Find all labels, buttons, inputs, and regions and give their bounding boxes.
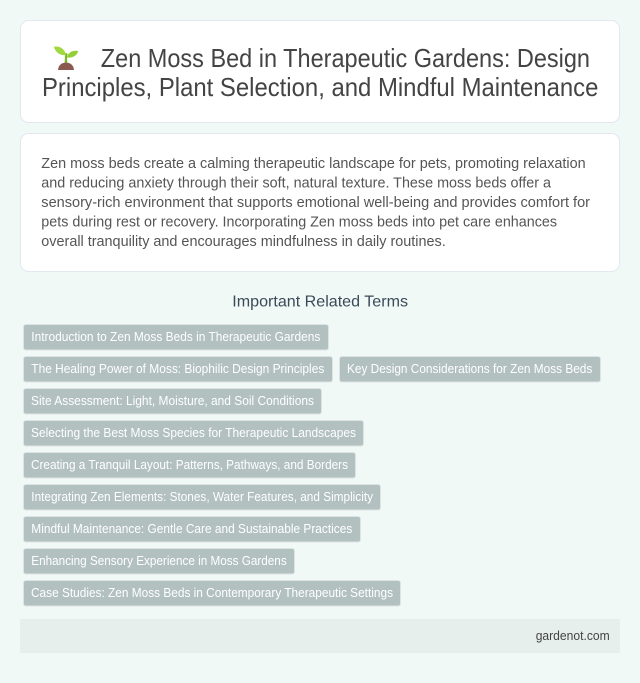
- tag: zen elements: Integrating Zen Elements: Stones, Water Features, and Simplicity: [31, 490, 374, 504]
- footer bar: [20, 619, 620, 653]
- tag: site assessment: [24, 388, 322, 414]
- panel: title card: [20, 20, 620, 122]
- text block: description: pets during rest or recovery. Incorporating Zen moss beds into pet care enhances: [41, 214, 557, 230]
- tag: site assessment: Site Assessment: Light, Moisture, and Soil Conditions: [31, 394, 314, 408]
- text block: description: and reducing anxiety through their soft, natural texture. These moss beds offer a: [41, 176, 551, 192]
- text block: description: [41, 156, 590, 250]
- tag: healing power: The Healing Power of Moss: Biophilic Design Principles: [31, 362, 324, 376]
- tag: tranquil layout: [24, 452, 356, 478]
- tag: introduction: Introduction to Zen Moss Beds in Therapeutic Gardens: [31, 330, 320, 344]
- title: Zen Moss Bed in Therapeutic Gardens: Design: [101, 45, 590, 73]
- tag: tranquil layout: Creating a Tranquil Layout: Patterns, Pathways, and Borders: [31, 458, 348, 472]
- tag: moss species: [24, 420, 364, 446]
- tag: mindful maintenance: Mindful Maintenance: Gentle Care and Sustainable Practices: [31, 522, 352, 536]
- text block: description: Zen moss beds create a calming therapeutic landscape for pets, promoting relaxation: [41, 156, 586, 172]
- tag: sensory experience: Enhancing Sensory Experience in Moss Gardens: [31, 554, 287, 568]
- panel: related terms tags: [24, 324, 600, 606]
- tag: sensory experience: [24, 548, 294, 574]
- footer source text: gardenot.com: [536, 628, 610, 643]
- tag: mindful maintenance: [24, 516, 360, 542]
- tag: key design: [340, 356, 600, 382]
- text block: description: sensory-rich environment that supports emotional well-being and provides comfort for: [41, 195, 590, 211]
- icon: seedling: [54, 46, 78, 70]
- tag: introduction: [24, 324, 328, 350]
- title: [42, 45, 598, 102]
- tag: key design: Key Design Considerations for Zen Moss Beds: [347, 362, 592, 376]
- panel: description card: [20, 134, 620, 272]
- heading: related terms: Important Related Terms: [232, 294, 408, 311]
- title: Principles, Plant Selection, and Mindful Maintenance: [42, 74, 598, 102]
- tag: moss species: Selecting the Best Moss Species for Therapeutic Landscapes: [31, 426, 356, 440]
- text block: description: overall tranquility and encourages mindfulness in daily routines.: [41, 234, 446, 250]
- tag: case studies: [24, 580, 400, 606]
- tag: healing power: [24, 356, 332, 382]
- tag: zen elements: [24, 484, 380, 510]
- tag: case studies: Case Studies: Zen Moss Beds in Contemporary Therapeutic Settings: [31, 586, 393, 600]
